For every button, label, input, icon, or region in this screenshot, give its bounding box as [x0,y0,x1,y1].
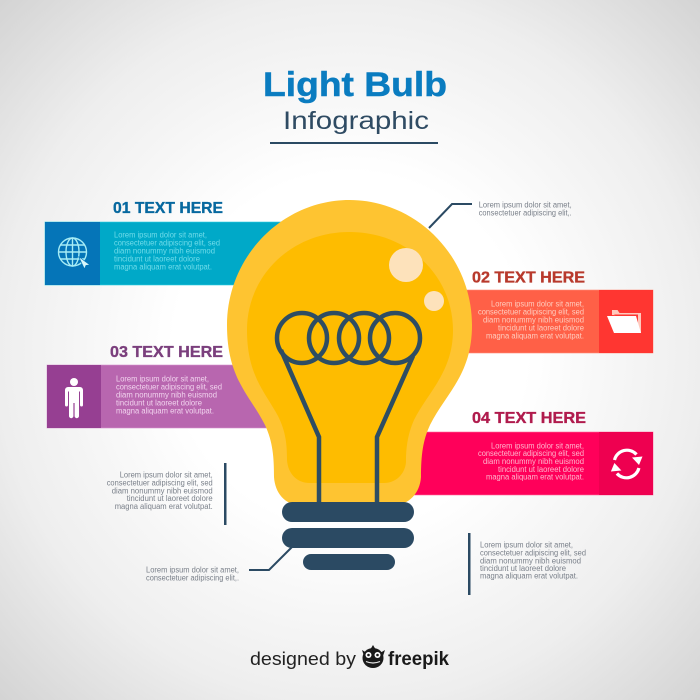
ribbon: 04 [400,432,653,495]
callout: bottom right: consectetuer adipiscing elit, sed [480,548,586,557]
callout: top right: consectetuer adipiscing elit,. [479,208,572,217]
body text: 02: diam nonummy nibh euismod [483,315,584,324]
body text: 01: diam nonummy nibh euismod [114,247,215,256]
callout: left middle: consectetuer adipiscing elit, sed [107,478,213,487]
title [263,66,447,144]
body text: 01: Lorem ipsum dolor sit amet, [114,231,207,240]
body text: 04: consectetuer adipiscing elit, sed [478,449,584,458]
icon: person [65,378,83,418]
callout: bottom right: Lorem ipsum dolor sit amet, [480,540,573,549]
body text: 03: consectetuer adipiscing elit, sed [116,383,222,392]
body text: 04: magna aliquam erat volutpat. [486,473,584,482]
screw base [282,502,414,570]
body text: 03: magna aliquam erat volutpat. [116,406,214,415]
footer credit [250,645,449,670]
body text: 01: consectetuer adipiscing elit, sed [114,239,220,248]
callout: bottom right [468,533,586,595]
icon tab: 04 [599,432,653,495]
heading: 04: 04 TEXT HERE [472,410,586,427]
body text: 04: tincidunt ut laoreet dolore [498,465,584,474]
ribbon: 03 [47,365,317,428]
light bulb [227,200,472,570]
panel: 01 text here [45,200,315,285]
heading: 01: 01 TEXT HERE [113,200,223,217]
filament wires [281,350,413,504]
icon tab: 03 [47,365,101,428]
heading: 03: 03 TEXT HERE [110,344,223,361]
callout: left middle [107,463,226,525]
callout: bottom left: Lorem ipsum dolor sit amet, [146,565,239,574]
heading: 02: 02 TEXT HERE [472,270,585,287]
highlights [389,248,444,311]
body text: 04 [478,441,584,482]
body text: 04: diam nonummy nibh euismod [483,457,584,466]
bulb glass outer [227,200,472,505]
callout: left middle: magna aliquam erat volutpat. [115,502,213,511]
bulb glass inner [247,232,453,483]
panel: 04 text here [400,410,653,495]
callout: left middle: tincidunt ut laoreet dolore [127,494,213,503]
body text: 03: Lorem ipsum dolor sit amet, [116,375,209,384]
callout: bottom right: magna aliquam erat volutpat. [480,572,578,581]
panel: 03 text here [47,344,317,428]
icon: refresh arrows [611,450,642,478]
icon: globe with cursor [58,238,90,269]
callout: left middle: diam nonummy nibh euismod [112,486,213,495]
body text: 03 [116,375,222,415]
body text: 01 [114,231,220,272]
panel: 02 text here [400,270,653,353]
callout: bottom right: tincidunt ut laoreet dolore [480,564,566,573]
title: Infographic [283,107,429,135]
icon tab: 02 [599,290,653,353]
body text: 02: Lorem ipsum dolor sit amet, [491,300,584,309]
body text: 03: diam nonummy nibh euismod [116,391,217,400]
callout: bottom left: consectetuer adipiscing elit,. [146,573,239,582]
callout: bottom right: diam nonummy nibh euismod [480,556,581,565]
footer credit: designed by [250,648,357,669]
icon: freepik logo [362,645,385,668]
icon tab: 01 [45,222,100,285]
body text: 02: consectetuer adipiscing elit, sed [478,308,584,317]
filament coil [277,313,420,363]
body text: 01: tincidunt ut laoreet dolore [114,255,200,264]
body text: 02 [478,300,584,340]
body text: 03: tincidunt ut laoreet dolore [116,399,202,408]
title: Light Bulb [263,66,447,104]
ribbon: 02 [400,290,653,353]
body text: 02: magna aliquam erat volutpat. [486,331,584,340]
callout: left middle: Lorem ipsum dolor sit amet, [120,470,213,479]
icon: folder [607,310,641,333]
ribbon: 01 [45,222,315,285]
callout: top right [429,200,572,228]
footer credit: freepik [388,649,449,670]
body text: 04: Lorem ipsum dolor sit amet, [491,441,584,450]
callout: bottom left [146,547,292,582]
body text: 01: magna aliquam erat volutpat. [114,263,212,272]
body text: 02: tincidunt ut laoreet dolore [498,323,584,332]
callout: top right: Lorem ipsum dolor sit amet, [479,200,572,209]
